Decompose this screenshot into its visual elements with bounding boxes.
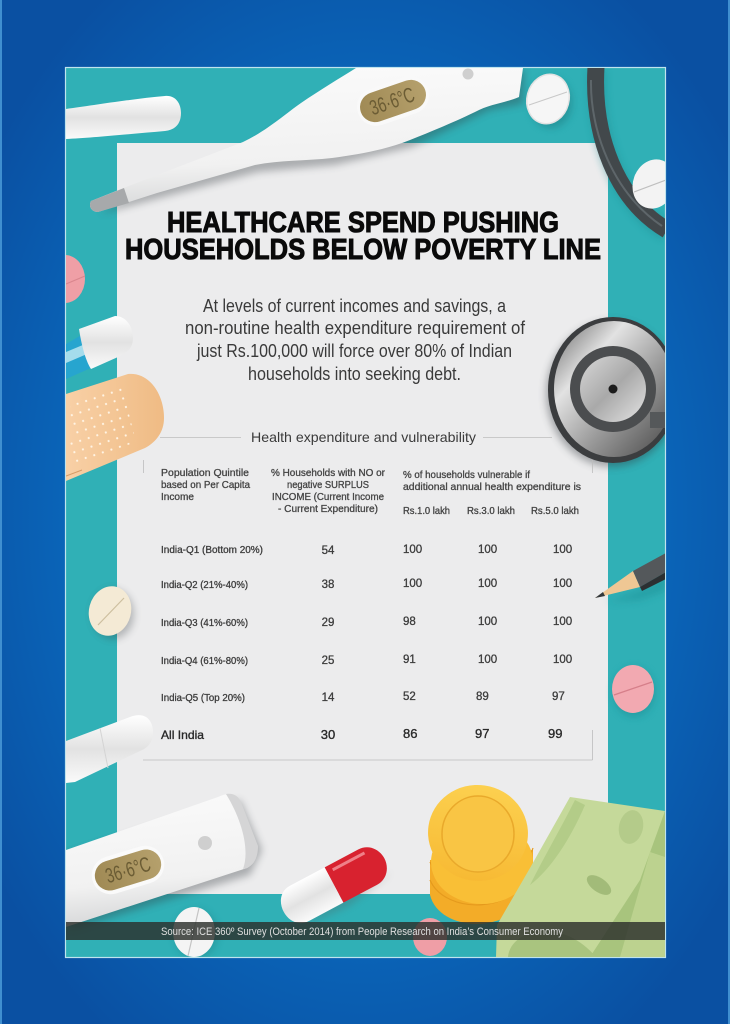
icon: adhesive bandage: [66, 374, 164, 481]
intro text: [185, 296, 526, 384]
icon: white pill bottom: [173, 907, 218, 959]
title: [125, 207, 601, 266]
table row: India-Q4: 25: [322, 655, 334, 667]
table row: All India: [161, 726, 562, 742]
table column headers: based on Per Capita: [161, 480, 250, 491]
table row: India-Q1: [161, 544, 572, 557]
paper sheet: [117, 143, 608, 894]
table column headers: negative SURPLUS: [287, 480, 369, 491]
table column headers: additional annual health expenditure is: [403, 482, 581, 493]
table column headers: INCOME (Current Income: [272, 492, 384, 503]
icon: small pink pill bottom: [413, 918, 447, 956]
table row: India-Q2: 38: [322, 579, 334, 591]
table column headers: Rs.5.0 lakh: [531, 506, 579, 517]
table row: India-Q4: India-Q4 (61%-80%): [161, 656, 248, 667]
table row: India-Q3: 98: [403, 616, 416, 628]
icon: cream pill: [88, 586, 138, 642]
table column headers: Population Quintile: [161, 468, 249, 479]
table heading: Health expenditure and vulnerability: [251, 429, 476, 445]
table row: All India: 86: [403, 726, 417, 741]
icon: pencil: [595, 553, 667, 602]
table row: India-Q3: 100: [478, 616, 497, 628]
table row: India-Q3: 29: [322, 617, 334, 629]
thermometer display: [92, 850, 162, 894]
icon: thermometer top: [90, 68, 524, 214]
table row: India-Q5: 52: [403, 691, 416, 703]
source bar: Source: ICE 360º Survey (October 2014) from People Research on India’s Consumer Economy: [161, 926, 563, 938]
teal framed panel: [66, 68, 666, 958]
table row: India-Q2: 100: [553, 578, 572, 590]
table frame lines: [143, 438, 592, 760]
table row: India-Q3: [161, 616, 572, 629]
table row: India-Q5: 14: [322, 692, 335, 704]
table column headers: Rs.3.0 lakh: [467, 506, 515, 517]
icon: gold coin stack: [428, 785, 534, 924]
table row: India-Q5: 89: [476, 691, 489, 703]
table row: India-Q1: India-Q1 (Bottom 20%): [161, 545, 263, 556]
icon: white capsule lower left: [66, 715, 153, 783]
icon: blue and white capsule: [66, 316, 133, 379]
table row: India-Q3: 100: [553, 616, 572, 628]
table row: All India: All India: [161, 728, 204, 742]
icon: stethoscope chestpiece: [546, 317, 678, 467]
table row: India-Q2: 100: [403, 578, 422, 590]
icon: bundle of green banknotes: [496, 797, 668, 957]
table row: India-Q3: India-Q3 (41%-60%): [161, 618, 248, 629]
icon: pink pill right: [612, 665, 655, 717]
title: HOUSEHOLDS BELOW POVERTY LINE: [125, 234, 601, 266]
table column headers: Rs.1.0 lakh: [403, 506, 450, 517]
icon: white pill top right: [526, 74, 574, 130]
table row: India-Q5: India-Q5 (Top 20%): [161, 693, 245, 704]
table row: India-Q5: 97: [552, 691, 565, 703]
icon: white capsule top left: [66, 96, 181, 139]
table column headers: Income: [161, 492, 194, 503]
icon: stethoscope tube: [591, 67, 667, 232]
table row: India-Q2: India-Q2 (21%-40%): [161, 580, 248, 591]
table row: India-Q2: [161, 578, 572, 591]
intro text: non-routine health expenditure requirement of: [185, 318, 526, 338]
table row: All India: 97: [475, 726, 489, 741]
table row: India-Q1: 54: [322, 545, 335, 557]
icon: white pill right edge: [632, 159, 665, 209]
icon: red and white capsule: [280, 847, 387, 924]
table row: India-Q4: [161, 654, 572, 667]
intro text: just Rs.100,000 will force over 80% of Indian: [196, 341, 512, 361]
title: HEALTHCARE SPEND PUSHING: [167, 207, 559, 239]
icon: pink pill left: [66, 255, 86, 303]
table row: India-Q4: 100: [553, 654, 572, 666]
source bar: [66, 922, 665, 940]
thermometer display: 36·6°C: [103, 853, 154, 888]
table row: India-Q4: 91: [403, 654, 416, 666]
table column headers: % Households with NO or: [271, 468, 386, 479]
table row: India-Q1: 100: [403, 544, 422, 556]
icon: thermometer bottom: [66, 794, 262, 930]
table column headers: % of households vulnerable if: [403, 470, 530, 481]
table row: All India: 30: [321, 727, 335, 742]
table row: India-Q4: 100: [478, 654, 497, 666]
table column headers: [161, 468, 581, 517]
table column headers: - Current Expenditure): [278, 504, 378, 515]
intro text: At levels of current incomes and savings, a: [203, 296, 507, 316]
intro text: households into seeking debt.: [248, 364, 461, 384]
table row: India-Q5: [161, 691, 565, 704]
thermometer display: 36·6°C: [367, 83, 418, 120]
table row: India-Q1: 100: [553, 544, 572, 556]
table row: India-Q2: 100: [478, 578, 497, 590]
table row: India-Q1: 100: [478, 544, 497, 556]
table row: All India: 99: [548, 726, 562, 741]
